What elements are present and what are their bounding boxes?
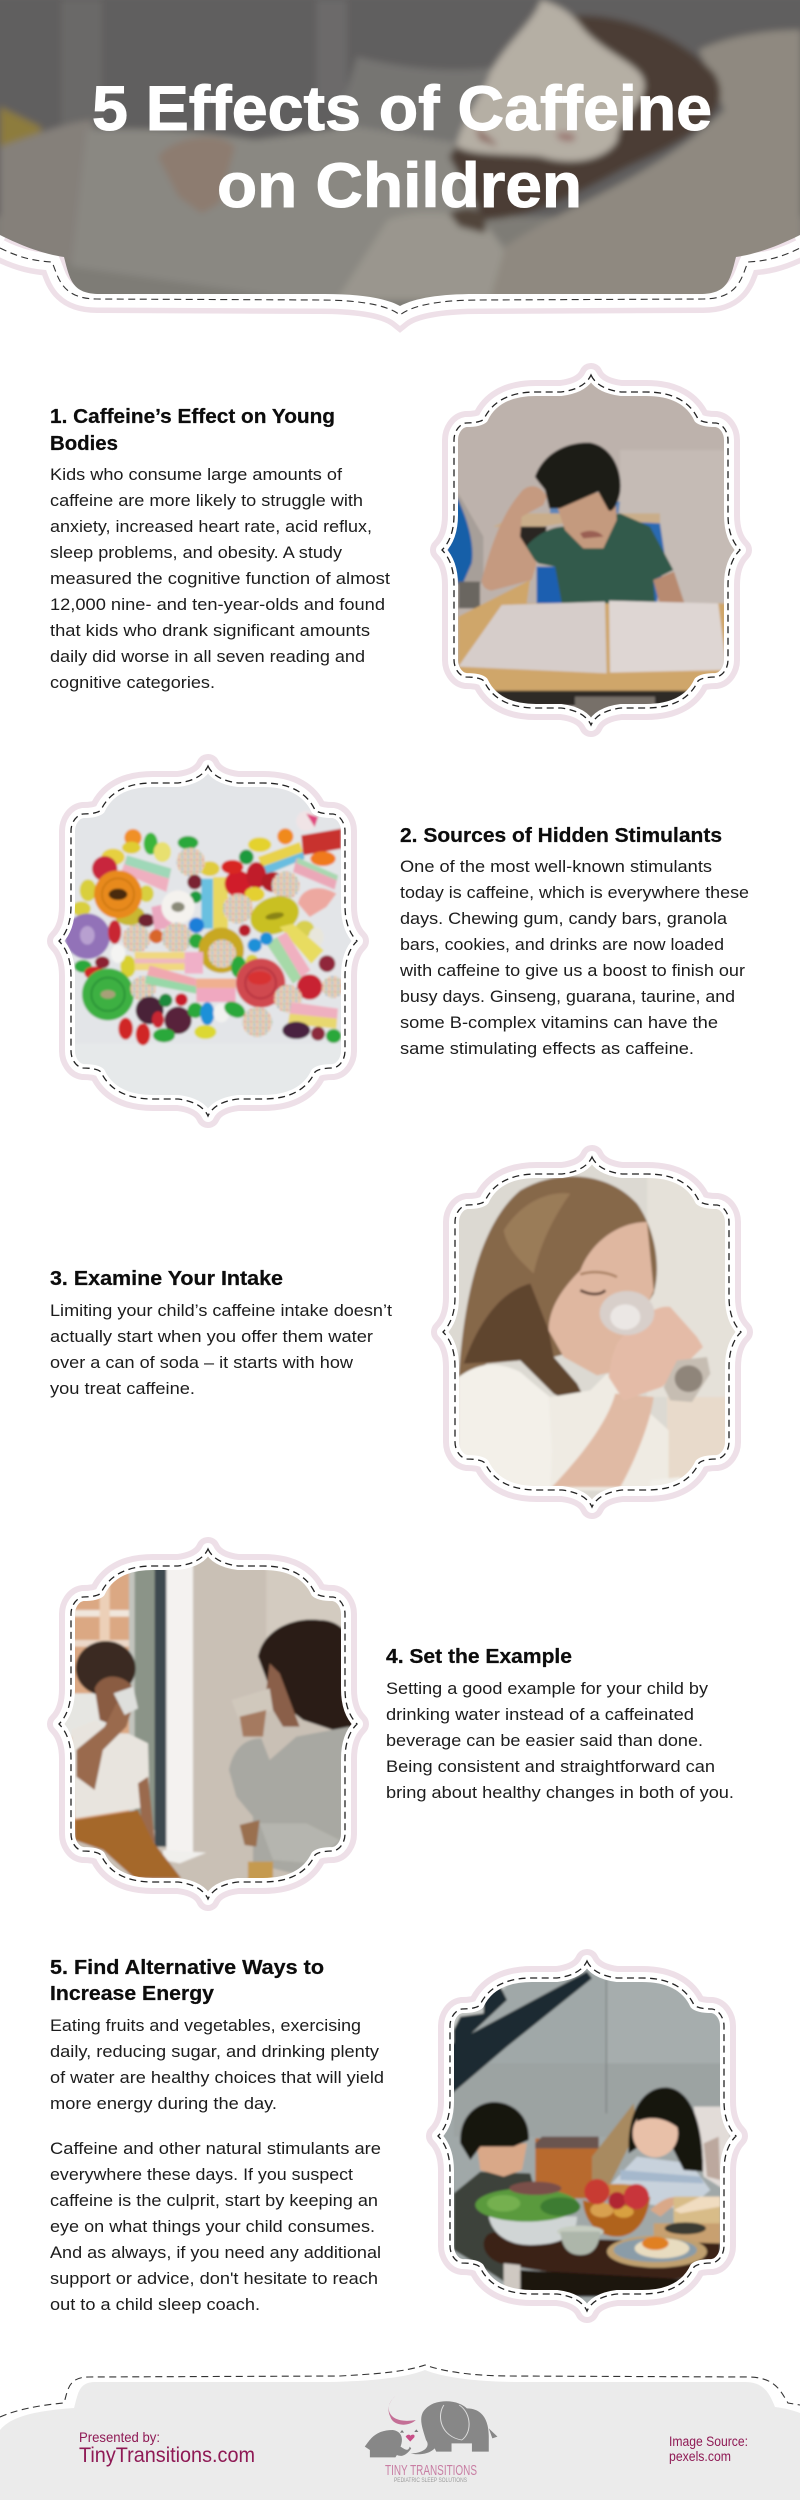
framed photo 4: woman and girl drinking water [53, 1530, 366, 1913]
framed photo 2: colourful candy [53, 750, 363, 1134]
body 5 [50, 2017, 384, 2314]
body 1: that kids who drank significant amounts [50, 622, 370, 640]
footer band [0, 2365, 800, 2500]
body 2: with caffeine to give us a boost to finish our [399, 962, 746, 980]
body 3: actually start when you offer them water [50, 1328, 374, 1346]
body 4: Being consistent and straightforward can [386, 1758, 715, 1776]
heading 1: Bodies [50, 432, 118, 455]
image source [669, 2434, 748, 2464]
body 1: daily did worse in all seven reading and [50, 648, 365, 666]
body 2: same stimulating effects as caffeine. [400, 1040, 694, 1058]
body 5: caffeine is the culprit, start by keeping an [50, 2192, 378, 2210]
body 1: 12,000 nine- and ten-year-olds and found [50, 596, 385, 614]
heading 5: Increase Energy [50, 1982, 215, 2005]
section 1 text [50, 405, 390, 692]
body 5: Eating fruits and vegetables, exercising [50, 2017, 361, 2035]
body 4: Setting a good example for your child by [386, 1680, 709, 1698]
body 4: bring about healthy changes in both of you. [386, 1784, 734, 1802]
heading 5 [50, 1956, 324, 2005]
body 4 [386, 1680, 734, 1802]
section 2 text [399, 824, 749, 1058]
title: 5 Effects of Caffeine [92, 74, 712, 144]
heading 3: 3. Examine Your Intake [50, 1267, 283, 1290]
presented by: Presented by: [79, 2429, 160, 2445]
heading 1: 1. Caffeine’s Effect on Young [50, 405, 335, 428]
body 2: busy days. Ginseng, guarana, taurine, and [400, 988, 735, 1006]
body 3 [50, 1302, 392, 1398]
body 5: support or advice, don't hesitate to reach [50, 2270, 378, 2288]
body 1: cognitive categories. [50, 674, 215, 692]
presented by [79, 2429, 255, 2467]
framed photo 3: girl drinking water [437, 1147, 747, 1520]
framed photo 1: tired boy at desk [437, 367, 747, 733]
body 1: caffeine are more likely to struggle with [50, 492, 363, 510]
body 1: measured the cognitive function of almost [50, 570, 390, 588]
body 2 [399, 858, 749, 1058]
section 3 text [50, 1267, 392, 1398]
logo: elephants and moon: TINY TRANSITIONS [385, 2463, 477, 2479]
section 5 text [50, 1956, 384, 2314]
body 5: out to a child sleep coach. [50, 2296, 260, 2314]
body 3: Limiting your child’s caffeine intake doesn’t [50, 1302, 392, 1320]
image source: Image Source: [669, 2434, 748, 2449]
heading 2: 2. Sources of Hidden Stimulants [400, 824, 722, 847]
body 2: One of the most well-known stimulants [400, 858, 712, 876]
body 5: more energy during the day. [50, 2095, 277, 2113]
body 3: over a can of soda – it starts with how [50, 1354, 353, 1372]
body 5: everywhere these days. If you suspect [50, 2166, 353, 2184]
framed photo 5: children at table with healthy food [434, 1947, 744, 2323]
logo: elephants and moon: PEDIATRIC SLEEP SOLUTIONS [394, 2477, 468, 2484]
heading 5: 5. Find Alternative Ways to [50, 1956, 324, 1979]
body 2: days. Chewing gum, candy bars, granola [400, 910, 728, 928]
body 1: anxiety, increased heart rate, acid reflux, [50, 518, 372, 536]
body 2: some B-complex vitamins can have the [400, 1014, 718, 1032]
section 4 text [386, 1645, 734, 1802]
body 2: bars, cookies, and drinks are now loaded [400, 936, 724, 954]
heading 4: 4. Set the Example [386, 1645, 572, 1668]
body 5: of water are healthy choices that will yield [50, 2069, 384, 2087]
body 1: sleep problems, and obesity. A study [50, 544, 343, 562]
header photo: sleeping child with mask [0, 0, 800, 306]
body 2: today is caffeine, which is everywhere these [400, 884, 749, 902]
body 4: beverage can be easier said than done. [386, 1732, 703, 1750]
title: on Children [217, 151, 582, 221]
body 1: Kids who consume large amounts of [50, 466, 342, 484]
body 3: you treat caffeine. [50, 1380, 195, 1398]
header band [0, 0, 800, 343]
image source: pexels.com [669, 2449, 731, 2464]
body 5: eye on what things your child consumes. [50, 2218, 375, 2236]
body 4: drinking water instead of a caffeinated [386, 1706, 694, 1724]
body 5: And as always, if you need any additional [50, 2244, 381, 2262]
logo: elephants and moon [365, 2396, 497, 2484]
body 5: Caffeine and other natural stimulants are [50, 2140, 381, 2158]
body 5: daily, reducing sugar, and drinking plenty [50, 2043, 380, 2061]
heading 1 [50, 405, 335, 455]
body 1 [50, 466, 390, 692]
presented by: TinyTransitions.com [79, 2443, 255, 2467]
title [92, 74, 712, 221]
